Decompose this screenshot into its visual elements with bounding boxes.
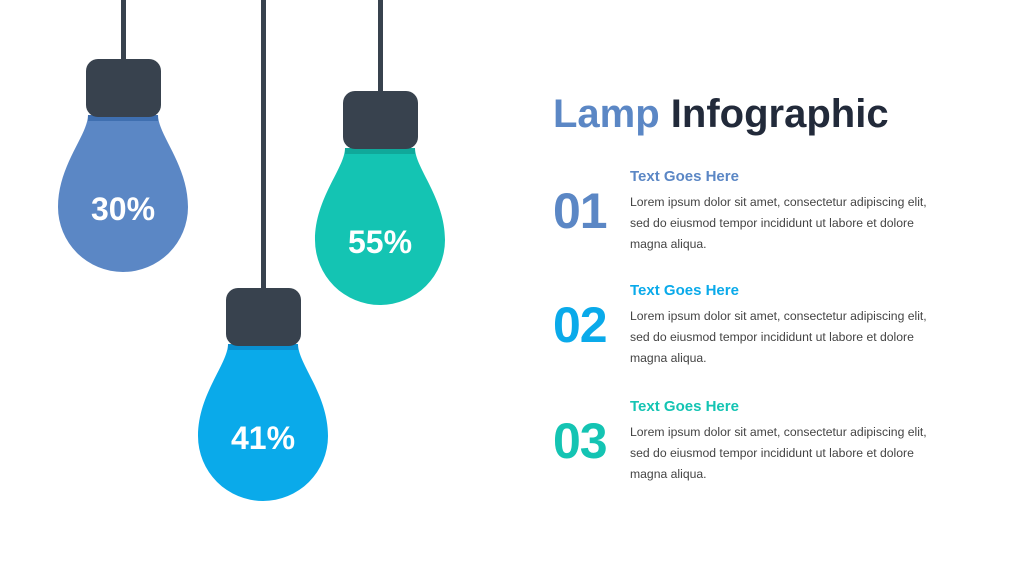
item 02: 02	[553, 297, 607, 353]
item 03: Lorem ipsum dolor sit amet, consectetur adipiscing elit,	[630, 425, 927, 439]
item 03: sed do eiusmod tempor incididunt ut labore et dolore	[630, 446, 914, 460]
item 02: sed do eiusmod tempor incididunt ut labore et dolore	[630, 330, 914, 344]
item 01	[553, 168, 927, 251]
title: Lamp Infographic	[553, 92, 889, 136]
item 01: Text Goes Here	[630, 168, 739, 185]
item 01: Lorem ipsum dolor sit amet, consectetur adipiscing elit,	[630, 195, 927, 209]
item 03: magna aliqua.	[630, 467, 707, 481]
lamp: 41%: 41%	[231, 420, 295, 456]
item 02: magna aliqua.	[630, 351, 707, 365]
item 01: magna aliqua.	[630, 237, 707, 251]
lamp: 41%	[198, 0, 328, 501]
lamps graphic	[58, 0, 445, 501]
lamp: 55%: 55%	[348, 224, 412, 260]
lamp: 55%	[315, 0, 445, 305]
item 03: Text Goes Here	[630, 398, 739, 415]
lamp: 30%: 30%	[91, 191, 155, 227]
item 03	[553, 398, 927, 481]
item 02: Lorem ipsum dolor sit amet, consectetur adipiscing elit,	[630, 309, 927, 323]
item 01: sed do eiusmod tempor incididunt ut labore et dolore	[630, 216, 914, 230]
item 01: 01	[553, 183, 607, 239]
item 02	[553, 282, 927, 365]
item 02: Text Goes Here	[630, 282, 739, 299]
item 03: 03	[553, 413, 607, 469]
lamp: 30%	[58, 0, 188, 272]
